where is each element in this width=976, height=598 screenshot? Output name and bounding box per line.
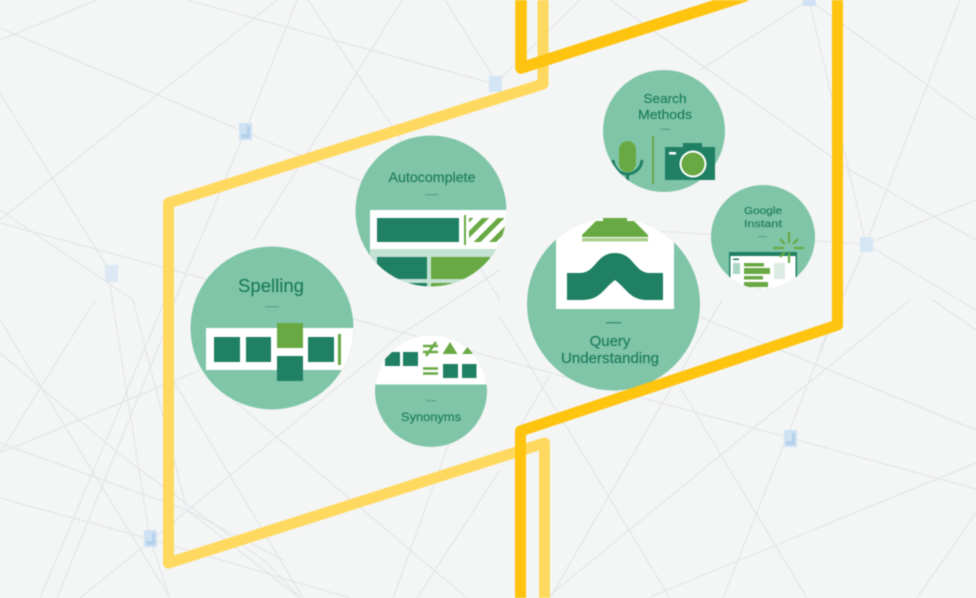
query heading: Understanding bbox=[561, 350, 659, 367]
autocomplete dash bbox=[425, 194, 438, 196]
light yellow path bbox=[168, 0, 544, 598]
circle: Synonyms bbox=[374, 336, 488, 448]
google instant heading: Google bbox=[744, 205, 782, 217]
query heading: Query bbox=[590, 333, 631, 350]
icon: click spark bbox=[773, 232, 804, 263]
search methods heading: Search bbox=[644, 91, 686, 106]
autocomplete heading: Autocomplete bbox=[388, 170, 476, 185]
synonyms illustration bbox=[385, 342, 476, 378]
circle: Google Instant bbox=[711, 185, 815, 292]
synonyms white panel bbox=[375, 334, 487, 386]
query dash bbox=[606, 322, 621, 324]
dark yellow path top bbox=[521, 0, 745, 68]
search methods heading bbox=[638, 91, 693, 122]
google instant dash bbox=[758, 236, 767, 237]
synonyms heading: Synonyms bbox=[401, 410, 461, 424]
dark yellow path main bbox=[520, 0, 838, 598]
icon: camera bbox=[665, 143, 715, 180]
query heading bbox=[561, 333, 659, 367]
spelling heading: Spelling bbox=[238, 276, 304, 296]
spelling illustration bbox=[206, 323, 356, 381]
circle: Query Understanding bbox=[527, 210, 700, 390]
circle: Spelling bbox=[190, 246, 356, 410]
synonyms dash bbox=[426, 400, 436, 402]
divider bbox=[652, 136, 654, 184]
circle: Search Methods bbox=[603, 70, 725, 192]
google instant heading bbox=[744, 205, 782, 230]
spelling dash bbox=[265, 306, 279, 308]
icon: microphone bbox=[613, 141, 642, 182]
browser illustration bbox=[729, 252, 797, 292]
circle: Autocomplete bbox=[356, 136, 510, 289]
query illustration panel bbox=[556, 210, 674, 309]
autocomplete illustration bbox=[370, 210, 510, 289]
google instant heading: Instant bbox=[744, 218, 782, 230]
search methods heading: Methods bbox=[638, 107, 693, 122]
document icons bbox=[105, 0, 873, 547]
search methods dash bbox=[660, 128, 670, 130]
